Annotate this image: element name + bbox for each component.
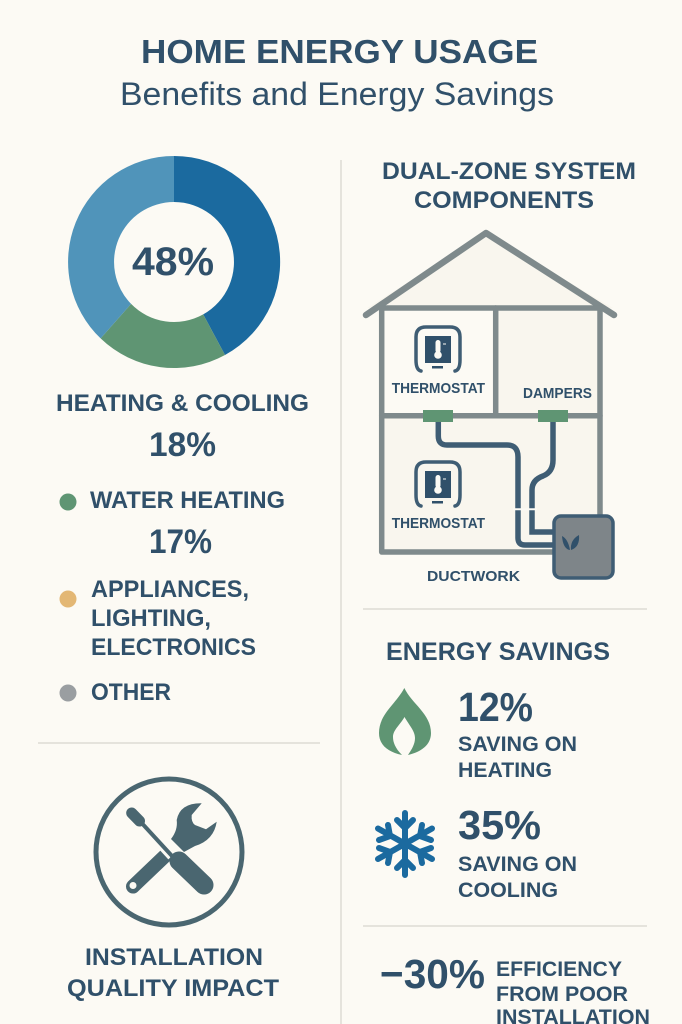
- stat: -30% efficiency from poor installation: [380, 951, 650, 1024]
- label: thermostat lower: THERMOSTAT: [392, 515, 485, 532]
- donut chart: [68, 156, 280, 368]
- label: thermostat upper: THERMOSTAT: [392, 380, 485, 397]
- legend: appliances, lighting, electronics: LIGHTING,: [91, 605, 211, 632]
- heading: installation quality impact: INSTALLATION: [85, 944, 263, 971]
- value: 18%: 18%: [149, 426, 216, 464]
- label: dampers: DAMPERS: [523, 385, 592, 402]
- HVAC unit: [554, 516, 613, 578]
- heading: dual-zone system components: DUAL-ZONE SYSTEM: [382, 158, 636, 185]
- legend: other: OTHER: [91, 679, 171, 706]
- label: ductwork: DUCTWORK: [427, 568, 520, 585]
- panel: energy savings: [378, 638, 650, 1024]
- panel: energy usage breakdown: [56, 156, 309, 706]
- heading: dual-zone system components: COMPONENTS: [414, 187, 594, 214]
- thermostat: upper: [416, 327, 460, 371]
- heading: dual-zone system components: [382, 158, 636, 214]
- heading: installation quality impact: [67, 944, 279, 1002]
- diagram: house with dual-zone system: [366, 233, 614, 585]
- ductwork lines: [438, 420, 556, 545]
- stat: -30% efficiency from poor installation: EFFICIENCY: [496, 958, 622, 981]
- legend: water heating: WATER HEATING: [90, 487, 285, 514]
- stat: 35% saving on cooling: COOLING: [458, 879, 558, 902]
- stat: -30% efficiency from poor installation: −30%: [380, 951, 485, 997]
- damper: right: [538, 410, 568, 422]
- stat: 12% saving on heating: HEATING: [458, 759, 552, 782]
- legend: heating and cooling: HEATING & COOLING: [56, 390, 309, 417]
- legend: appliances, lighting, electronics: [60, 576, 256, 661]
- stat: -30% efficiency from poor installation: FROM POOR: [496, 983, 628, 1006]
- legend: other: [60, 679, 171, 706]
- thermostat: lower: [416, 462, 460, 506]
- subtitle: Benefits and Energy Savings: [120, 76, 554, 112]
- value: 17%: 17%: [149, 523, 212, 561]
- panel: installation quality impact: [67, 779, 279, 1002]
- stat: 35% saving on cooling: SAVING ON: [458, 853, 577, 876]
- legend: appliances, lighting, electronics: ELECTRONICS: [91, 634, 256, 661]
- icon: crossed wrench and screwdriver: [96, 779, 242, 925]
- donut chart: 48%: [132, 240, 214, 284]
- stat: 35% saving on cooling: [458, 802, 577, 902]
- stat: 12% saving on heating: 12%: [458, 684, 533, 730]
- stat: 35% saving on cooling: 35%: [458, 802, 541, 848]
- heading: installation quality impact: QUALITY IMPACT: [67, 975, 279, 1002]
- damper: left: [423, 410, 453, 422]
- icon: flame: [379, 688, 431, 755]
- icon: snowflake: [378, 813, 432, 875]
- legend: appliances, lighting, electronics: APPLIANCES,: [91, 576, 249, 603]
- title: HOME ENERGY USAGE: [141, 33, 538, 70]
- stat: 12% saving on heating: SAVING ON: [458, 733, 577, 756]
- stat: 12% saving on heating: [458, 684, 577, 782]
- heading: energy savings: ENERGY SAVINGS: [386, 638, 610, 666]
- title: [120, 33, 554, 112]
